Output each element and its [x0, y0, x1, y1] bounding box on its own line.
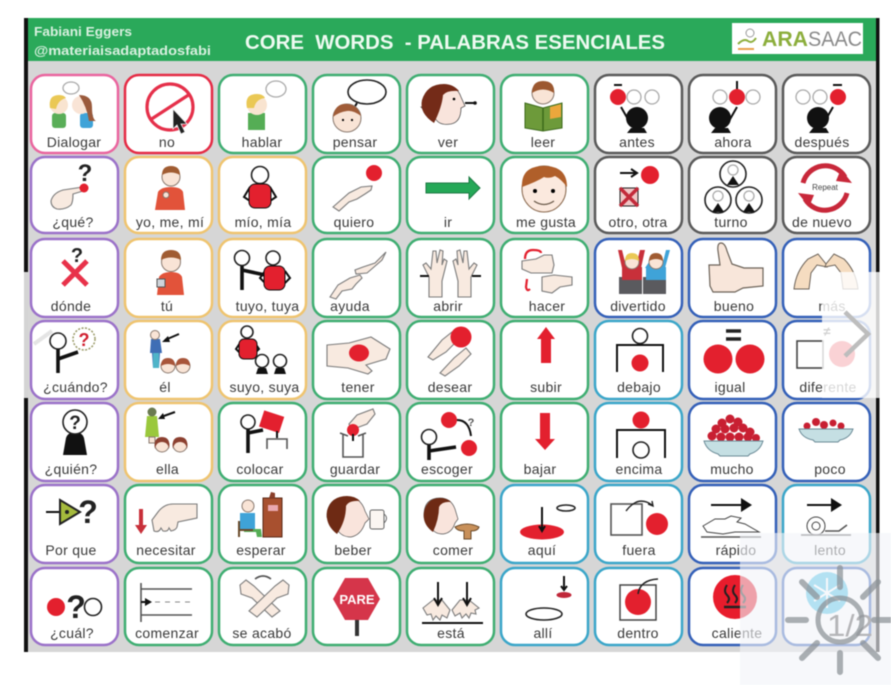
icon: arrow and red dot — [620, 166, 659, 206]
label: antes — [619, 134, 655, 150]
card: rápido — [689, 485, 776, 563]
card: guardar — [313, 403, 400, 481]
icon: man and listeners — [150, 330, 190, 373]
icon: red dot outside box — [611, 501, 668, 535]
card: ver — [407, 75, 494, 153]
icon: red dot in box — [620, 579, 658, 620]
label: dónde — [51, 298, 91, 314]
label: bueno — [714, 298, 754, 314]
label: se acabó — [232, 625, 292, 641]
ARASAAC logo — [732, 23, 863, 54]
icon: future marker — [796, 85, 846, 133]
label: pensar — [333, 134, 377, 150]
card: abrir — [407, 239, 494, 317]
label: fuera — [622, 542, 656, 558]
label: comenzar — [135, 625, 199, 641]
label: necesitar — [136, 542, 196, 558]
icon: figure with red body — [244, 166, 276, 208]
label: ¿cuándo? — [43, 379, 108, 395]
card: bueno — [689, 239, 776, 317]
icon: hands reaching ball — [428, 326, 472, 376]
card: dentro — [595, 568, 682, 645]
icon: square and circle: ≠ — [823, 324, 831, 339]
card: bajar — [501, 403, 588, 481]
card: pensar — [313, 75, 400, 153]
label: bajar — [524, 461, 556, 477]
icon: pointing hand with question: ? — [78, 160, 92, 187]
label: divertido — [610, 298, 666, 314]
card: escoger — [407, 403, 494, 481]
label: ver — [438, 134, 458, 150]
card: está — [407, 568, 494, 645]
icon: start line — [141, 583, 192, 622]
label: allí — [533, 625, 553, 641]
icon: hand storing red box — [340, 409, 375, 457]
label: diferente — [799, 379, 857, 395]
card: comenzar — [125, 568, 212, 645]
icon: red dot, question, white dot: ? — [66, 589, 86, 625]
overlay: previous slide marker — [24, 272, 52, 398]
card: colocar — [219, 403, 306, 481]
label: turno — [714, 214, 748, 230]
label: encima — [616, 461, 662, 477]
icon: spinner sun — [788, 568, 891, 672]
card: fuera — [595, 485, 682, 563]
icon: red up arrow — [537, 327, 555, 363]
label: después — [794, 134, 850, 150]
card: encima — [595, 403, 682, 481]
icon: red figure with two heads — [236, 326, 286, 374]
card: Por que — [31, 485, 118, 563]
card: divertido — [595, 239, 682, 317]
icon: thinking head — [333, 80, 386, 132]
label: quiero — [334, 214, 374, 230]
icon: question over red cross: ? — [71, 245, 83, 267]
overlay: loading panel — [740, 533, 891, 685]
right black edge — [876, 18, 880, 652]
card: tú — [125, 239, 212, 317]
icon: head drinking — [327, 496, 386, 537]
card: beber — [313, 485, 400, 563]
card: caliente — [689, 568, 776, 645]
icon: mouse cursor — [173, 109, 187, 134]
label: subir — [530, 379, 562, 395]
icon: head looking — [421, 84, 477, 124]
icon: thumb up — [709, 243, 763, 292]
icon: hands pointing down — [422, 582, 483, 623]
author credit — [34, 24, 211, 58]
label: comer — [433, 542, 473, 558]
label: hablar — [242, 134, 282, 150]
label: ahora — [714, 134, 752, 150]
label: ¿quién? — [45, 461, 97, 477]
card: mío, mía — [219, 157, 306, 233]
label: igual — [714, 379, 746, 395]
label: beber — [334, 542, 372, 558]
icon: triangle with question: ? — [78, 494, 98, 530]
card: ¿quién? — [31, 403, 118, 481]
label: debajo — [617, 379, 661, 395]
label: tú — [161, 298, 173, 314]
icon: person with clock question: ? — [78, 330, 90, 350]
icon: snail and arrow — [801, 498, 851, 535]
label: escoger — [421, 461, 473, 477]
card: turno — [689, 157, 776, 233]
icon: hare and arrow — [701, 498, 761, 537]
overlay: next slide panel — [822, 272, 881, 398]
card: hacer — [501, 239, 588, 317]
icon: next chevron — [845, 312, 868, 356]
label: ayuda — [330, 298, 370, 314]
page counter: 1/2 — [827, 608, 873, 643]
label: leer — [531, 134, 555, 150]
label: colocar — [236, 461, 284, 477]
icon: hand reaching red dot — [333, 165, 382, 211]
label: yo, me, mí — [136, 214, 204, 230]
label: está — [437, 625, 465, 641]
icon: figure choosing dots: ? — [468, 417, 475, 429]
icon: person pointing to self — [155, 166, 185, 210]
card: ¿cuándo? — [31, 321, 118, 399]
card: PARE — [313, 568, 400, 645]
label: ¿qué? — [52, 214, 94, 230]
left black edge — [24, 18, 28, 652]
author credit: @materiaisadaptadosfabi — [34, 43, 211, 58]
icon: distant red spot — [526, 576, 572, 620]
card: yo, me, mí — [125, 157, 212, 233]
card: dónde — [31, 239, 118, 317]
icon: red spot with arrow — [520, 505, 575, 540]
label: suyo, suya — [230, 379, 299, 395]
author credit: Fabiani Eggers — [34, 24, 132, 39]
card: ahora — [689, 75, 776, 153]
ARASAAC logo: SAAC — [808, 28, 862, 51]
label: mucho — [710, 461, 754, 477]
card: después — [783, 75, 870, 153]
icon: past marker — [610, 85, 659, 133]
card: se acabó — [219, 568, 306, 645]
card: quiero — [313, 157, 400, 233]
icon: previous chevron — [34, 331, 52, 344]
label: tener — [341, 379, 375, 395]
icon: head eating — [424, 498, 479, 539]
icon: red dot under frame — [617, 328, 663, 372]
card: necesitar — [125, 485, 212, 563]
label: otro, otra — [608, 214, 668, 230]
ARASAAC logo: ARA — [762, 28, 808, 51]
icon: two equal red circles — [704, 331, 764, 374]
label: él — [159, 379, 171, 395]
icon: red down arrow — [535, 413, 555, 450]
label: hacer — [529, 298, 565, 314]
icon: head pointing at red figure — [234, 250, 290, 290]
icon: red dot on frame — [617, 412, 665, 458]
icon: repeat arrows: Repeat — [812, 183, 839, 192]
card: ella — [125, 403, 212, 481]
label: esperar — [236, 542, 286, 558]
label: más — [818, 298, 846, 314]
label: poco — [814, 461, 846, 477]
card: aquí — [501, 485, 588, 563]
label: me gusta — [516, 214, 576, 230]
icon: hand pressing down — [135, 504, 197, 534]
card: no — [125, 75, 212, 153]
label: tuyo, tuya — [236, 298, 299, 314]
label: ir — [444, 214, 452, 230]
icon: bowl with few berries — [799, 418, 853, 442]
label: desear — [428, 379, 472, 395]
icon: present marker — [709, 81, 760, 133]
icon: stop sign: PARE — [339, 592, 375, 607]
icon: blue snowflake circle — [806, 572, 848, 614]
card: leer — [501, 75, 588, 153]
card: tener — [313, 321, 400, 399]
label: abrir — [433, 298, 463, 314]
card: más — [783, 239, 870, 317]
label: de nuevo — [792, 214, 852, 230]
label: lento — [814, 542, 846, 558]
card: otro, otra — [595, 157, 682, 233]
card: ¿qué? — [31, 157, 118, 233]
icon: two people talking — [50, 82, 96, 128]
label: caliente — [712, 625, 762, 641]
card: igual — [689, 321, 776, 399]
icon: boy reading book — [525, 81, 562, 131]
icon: smiling boy — [522, 166, 567, 212]
icon: bowl full of berries — [704, 414, 763, 456]
icon: green arrow — [426, 177, 480, 199]
icon: boy speaking — [246, 81, 286, 130]
card: ir — [407, 157, 494, 233]
card: suyo, suya — [219, 321, 306, 399]
label: guardar — [330, 461, 380, 477]
card: esperar — [219, 485, 306, 563]
card: debajo — [595, 321, 682, 399]
card: tuyo, tuya — [219, 239, 306, 317]
label: aquí — [528, 542, 556, 558]
icon: red hot circle — [713, 575, 757, 619]
label: rápido — [716, 542, 756, 558]
card: diferente — [783, 321, 870, 399]
icon: working hands — [522, 250, 572, 293]
card: mucho — [689, 403, 776, 481]
card: Dialogar — [31, 75, 118, 153]
title: CORE WORDS - PALABRAS ESENCIALES — [245, 32, 665, 54]
icon: prohibition sign — [147, 84, 193, 130]
card: antes — [595, 75, 682, 153]
icon: helping hands — [330, 252, 386, 299]
label: no — [159, 134, 175, 150]
card: lento — [783, 485, 870, 563]
card: subir — [501, 321, 588, 399]
icon: open hands — [420, 250, 481, 297]
label: Dialogar — [47, 134, 101, 150]
label: Por que — [45, 542, 97, 558]
label: ¿cuál? — [50, 625, 94, 641]
header banner — [28, 18, 876, 61]
icon: hands pinching — [794, 254, 858, 289]
card: desear — [407, 321, 494, 399]
icon: person pointing outward — [157, 250, 184, 295]
label: dentro — [617, 625, 659, 641]
card: me gusta — [501, 157, 588, 233]
card: poco — [783, 403, 870, 481]
icon: woman and listeners — [145, 408, 187, 452]
card: ¿cuál? — [31, 568, 118, 645]
icon: two people cheering — [618, 250, 670, 294]
card: de nuevo — [783, 157, 870, 233]
icon: crossed arms — [240, 576, 289, 617]
label: ella — [156, 461, 179, 477]
card: él — [125, 321, 212, 399]
card: frío — [783, 568, 870, 645]
icon: question head on black figure: ? — [69, 413, 81, 434]
icon: person waiting at door — [239, 492, 282, 537]
card: hablar — [219, 75, 306, 153]
label: mío, mía — [235, 214, 291, 230]
icon: figure placing red box — [241, 410, 287, 453]
icon: hand holding ball — [327, 337, 390, 374]
icon: three people in circles — [705, 161, 762, 213]
card: ayuda — [313, 239, 400, 317]
card: allí — [501, 568, 588, 645]
card: comer — [407, 485, 494, 563]
